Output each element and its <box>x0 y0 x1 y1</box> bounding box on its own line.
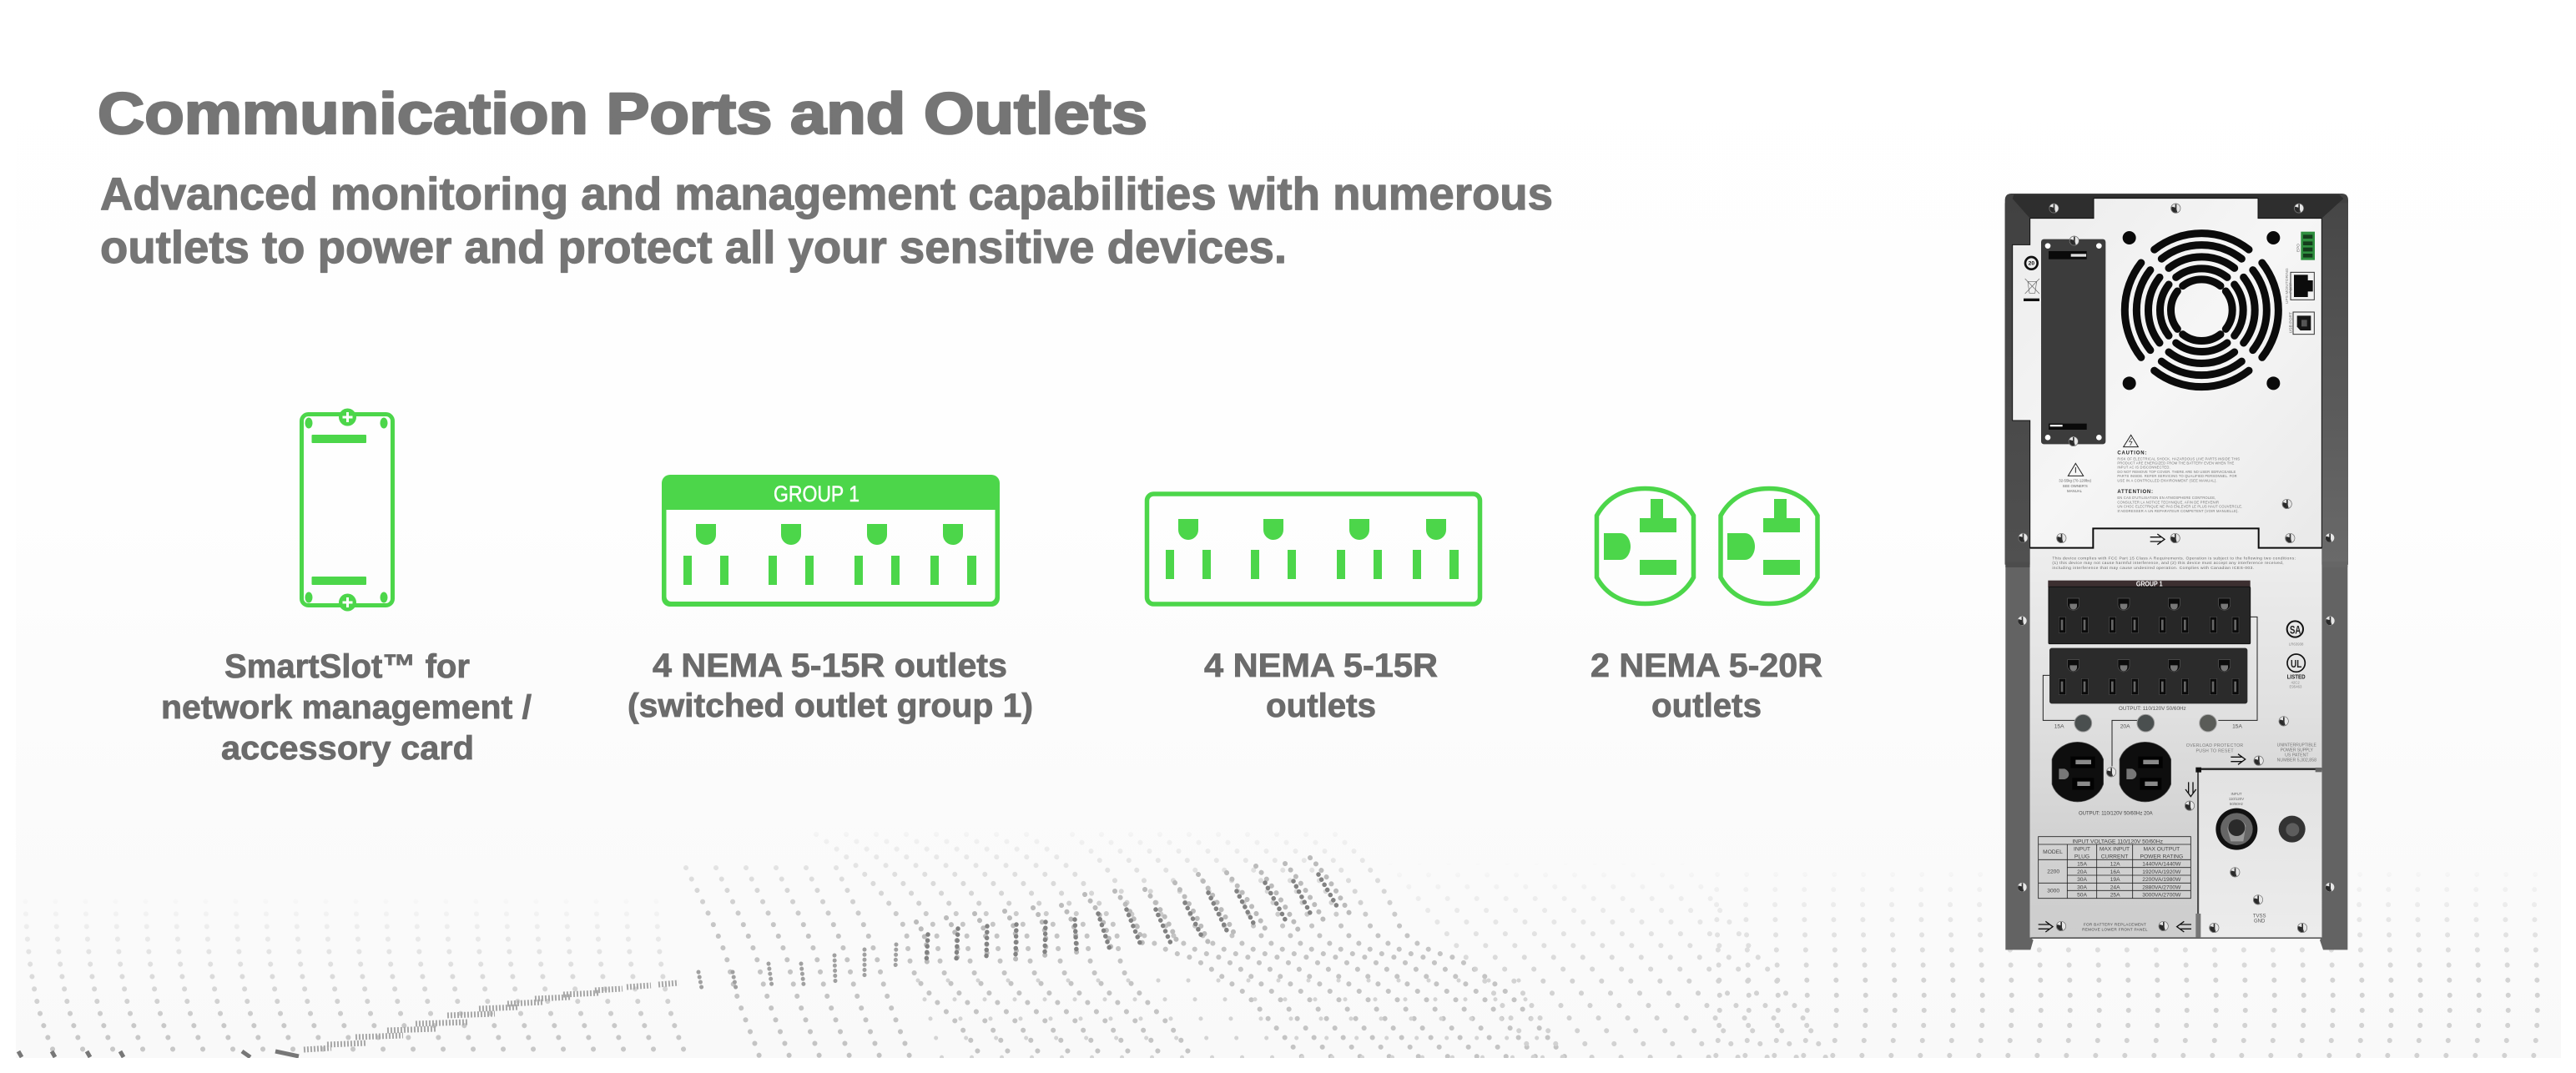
ratings table: MAX INPUT <box>2100 847 2130 853</box>
panel arrows <box>2039 754 2246 932</box>
certification marks: 42C2 <box>2291 681 2300 685</box>
ratings table: PLUG <box>2074 854 2090 860</box>
label: two NEMA 5-20R outlets <box>1590 647 1822 724</box>
ratings table: 2200 <box>2047 869 2059 875</box>
ratings table: MODEL <box>2043 849 2063 855</box>
circuit breakers <box>2054 714 2242 732</box>
network port: PORT <box>2289 283 2293 294</box>
overload and patent notes: POWER SUPPLY <box>2281 748 2314 753</box>
label: four NEMA 5-15R outlets: 4 NEMA 5-15R <box>1204 647 1438 684</box>
certification marks: UL <box>2291 658 2302 670</box>
ratings table: 2880VA/2700W <box>2142 884 2181 890</box>
circuit breakers: 20A <box>2120 724 2130 730</box>
background: white to soft grey with dotted wave <box>17 832 2540 1058</box>
ratings table <box>2039 837 2190 899</box>
caution text: ATTENTION: <box>2117 490 2153 495</box>
label: group 1 outlets <box>628 647 1033 724</box>
subtitle <box>100 168 1553 273</box>
caution text: CAUTION: <box>2117 451 2146 456</box>
ratings table: 15A <box>2077 862 2087 868</box>
ratings table: 3000 <box>2047 889 2059 894</box>
caution text: CONSULTER LA NOTICE TECHNIQUE. AFIN DE PREVENIR <box>2117 500 2219 504</box>
subtitle: outlets to power and protect all your sensitive devices. <box>100 221 1287 273</box>
ratings table: 19A <box>2110 877 2120 883</box>
FCC notice: This device complies with FCC Part 15 Class A Requirements. Operation is subject to the following two conditions: <box>2052 556 2296 561</box>
UPS upper section <box>2005 194 2348 565</box>
label: SmartSlot <box>161 648 532 767</box>
ratings table: MAX OUTPUT <box>2144 847 2180 853</box>
certification marks: SA <box>2290 622 2301 636</box>
switched outlet strip <box>2048 581 2251 644</box>
icon: group 1 outlets <box>662 475 1000 607</box>
smart slot card <box>2041 236 2105 446</box>
USB port <box>2289 312 2314 335</box>
label: four NEMA 5-15R outlets: outlets <box>1266 688 1376 724</box>
wiring lines <box>2043 617 2257 766</box>
ratings table: CURRENT <box>2101 854 2128 860</box>
label: four NEMA 5-15R outlets <box>1204 647 1438 724</box>
ratings table: POWER RATING <box>2140 854 2183 860</box>
input panel: 110/120V <box>2229 797 2244 801</box>
input panel: GND <box>2254 919 2266 924</box>
ratings table: 20A <box>2077 869 2087 875</box>
circuit breakers: 15A <box>2054 724 2064 730</box>
battery replacement note: REMOVE LOWER FRONT PANEL <box>2082 927 2148 931</box>
battery replacement note <box>2082 922 2148 931</box>
network port <box>2285 268 2314 304</box>
caution text: UN CHOC ELECTRIQUE NE PAS ENLEVER LE PLUS HAUT COUVERCLE. <box>2117 505 2242 509</box>
unswitched outlet strip <box>2049 648 2247 712</box>
20A outlets: OUTPUT: 110/120V 50/60Hz 20A <box>2079 812 2153 817</box>
overload and patent notes: PUSH TO RESET <box>2195 749 2234 754</box>
ratings table: 16A <box>2110 869 2120 875</box>
caution text: EN CAS D'UTILISATION EN ATMOSPHERE CONTROLEE, <box>2117 496 2216 500</box>
overload and patent notes: NUMBER 5,302,858 <box>2277 758 2316 763</box>
caution text: S'ADDRESSER A UN REPARATEUR COMPETENT (VOIR MANUELLE). <box>2117 509 2239 513</box>
caution text: PARTS INSIDE. REFER SERVICING TO QUALIFIED PERSONNEL. FOR <box>2117 474 2237 478</box>
certification marks: LISTED <box>2287 674 2306 680</box>
ratings table: 12A <box>2110 862 2120 868</box>
UPS lower section <box>2005 528 2347 950</box>
caution text: PRODUCT ARE ENERGIZED FROM THE BATTERY EVEN WHEN THE <box>2117 461 2235 465</box>
weight warning: 32-55kg (70-120lbs) <box>2059 479 2092 483</box>
FCC notice: (1) this device may not cause harmful interference, and (2) this device must accept any interference received, <box>2052 561 2284 566</box>
caution text: INPUT AC IS DISCONNECTED. <box>2117 466 2170 470</box>
icon: group 1 outlets: GROUP 1 <box>774 481 860 506</box>
weight warning: MANUAL <box>2067 489 2083 493</box>
EPO terminal <box>2296 232 2315 260</box>
switched outlet strip: GROUP 1 <box>2136 581 2163 588</box>
ratings table: 50A <box>2077 892 2087 898</box>
battery replacement note: FOR BATTERY REPLACEMENT <box>2084 922 2146 926</box>
label: two NEMA 5-20R outlets: outlets <box>1651 688 1762 724</box>
overload and patent notes: OVERLOAD PROTECTOR <box>2186 743 2243 748</box>
caution text: DO NOT REMOVE TOP COVER. THERE ARE NO USER SERVICEABLE <box>2117 470 2236 474</box>
label: SmartSlot: network management / <box>161 689 532 726</box>
ratings table: 30A <box>2077 884 2087 890</box>
network port: UPS MONITORING <box>2285 268 2289 304</box>
UPS rear panel <box>2005 194 2348 950</box>
FCC notice <box>2052 556 2296 571</box>
recycling marks: 20 <box>2029 261 2034 267</box>
label: two NEMA 5-20R outlets: 2 NEMA 5-20R <box>1590 647 1822 684</box>
20A outlets <box>2052 742 2171 817</box>
ratings table: 2200VA/1980W <box>2142 877 2181 883</box>
input panel: INPUT <box>2231 792 2242 796</box>
overload and patent notes: US PATENT <box>2285 753 2309 758</box>
certification marks: E95463 <box>2290 685 2302 689</box>
subtitle: Advanced monitoring and management capabilities with numerous <box>100 168 1553 219</box>
ratings table: 30A <box>2077 877 2087 883</box>
ratings table: 1920VA/1920W <box>2142 869 2181 875</box>
notch arrow and screw <box>2150 533 2180 545</box>
label: SmartSlot: accessory card <box>221 730 474 767</box>
overload and patent notes <box>2186 743 2317 763</box>
weight warning: SEE OWNER'S <box>2063 484 2088 488</box>
ratings table: INPUT VOLTAGE 110/120V 50/60Hz <box>2072 839 2163 845</box>
caution text: USE IN A CONTROLLED ENVIRONMENT (SEE MANUAL). <box>2117 478 2217 482</box>
input panel <box>2195 768 2321 937</box>
caution text: RISK OF ELECTRICAL SHOCK, HAZARDOUS LIVE PARTS INSIDE THIS <box>2117 456 2240 461</box>
label: SmartSlot: SmartSlot™ for <box>224 648 470 685</box>
unswitched outlet strip: OUTPUT: 110/120V 50/60Hz <box>2119 706 2186 712</box>
icon: four NEMA 5-15R outlets <box>1147 494 1480 604</box>
label: group 1 outlets: (switched outlet group 1) <box>628 688 1033 724</box>
recycling marks <box>2024 257 2039 301</box>
fan grille <box>2123 231 2280 390</box>
weight warning <box>2059 463 2092 493</box>
ratings table: INPUT <box>2074 847 2090 853</box>
ratings table: 25A <box>2110 892 2120 898</box>
ratings table: 24A <box>2110 884 2120 890</box>
title: Communication Ports and Outlets <box>98 81 1147 146</box>
ratings table: 1440VA/1440W <box>2142 862 2181 868</box>
icon: two NEMA 5-20R outlets <box>1597 489 1817 604</box>
FCC notice: including interference that may cause undesired operation. Complies with Canadian ICES-003. <box>2052 566 2254 571</box>
circuit breakers: 15A <box>2232 724 2242 730</box>
caution text <box>2117 435 2242 513</box>
input panel: 50/60Hz <box>2230 802 2243 806</box>
EPO terminal: EPO <box>2296 244 2301 252</box>
ratings table: 3000VA/2700W <box>2142 892 2181 898</box>
label: group 1 outlets: 4 NEMA 5-15R outlets <box>653 647 1007 684</box>
certification marks: LR63938 <box>2289 642 2304 647</box>
overload and patent notes: UNINTERRUPTIBLE <box>2277 743 2317 748</box>
USB port: USB PORT <box>2289 312 2294 333</box>
certification marks <box>2287 621 2306 689</box>
panel seam with centre notch <box>2030 528 2321 548</box>
input panel: TVSS <box>2253 914 2266 919</box>
icon: SmartSlot card <box>302 409 392 611</box>
